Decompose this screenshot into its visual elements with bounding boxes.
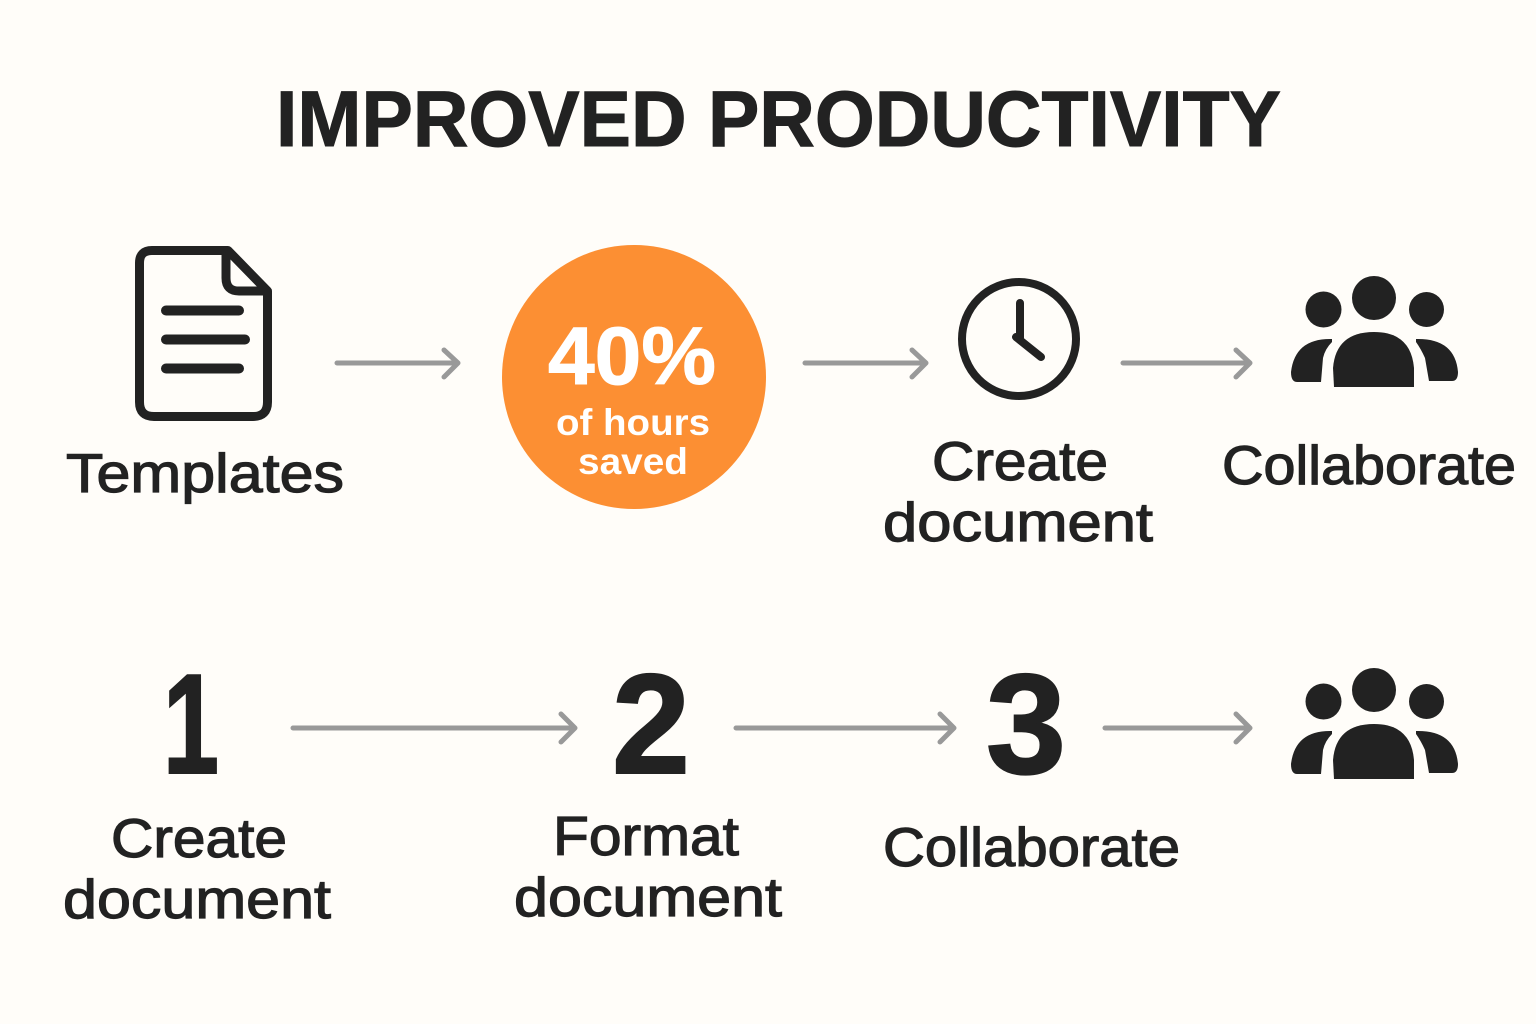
label: Format document, step 2: document bbox=[514, 866, 782, 928]
number 2: 2 bbox=[612, 645, 690, 804]
arrow: step 3 to people bbox=[1105, 714, 1250, 742]
icon: people group bbox=[1291, 276, 1458, 387]
icon: clock bbox=[962, 282, 1076, 396]
stat circle: 40% of hours saved bbox=[502, 245, 766, 509]
label: Create document: Create bbox=[932, 430, 1108, 492]
title: IMPROVED PRODUCTIVITY bbox=[276, 74, 1281, 163]
label: Create document bbox=[883, 430, 1153, 553]
label: Templates: Templates bbox=[66, 442, 344, 504]
arrow: step 1 to step 2 bbox=[293, 714, 575, 742]
label: Create document, step 1 bbox=[63, 807, 331, 930]
label: Create document, step 1: document bbox=[63, 868, 331, 930]
arrow: 40 percent to clock bbox=[805, 350, 926, 377]
icon: people group, step row bbox=[1291, 668, 1458, 779]
label: Format document, step 2 bbox=[514, 805, 782, 928]
number 3: 3 bbox=[986, 645, 1066, 804]
arrow: templates to 40 percent bbox=[337, 350, 458, 377]
label: Create document: document bbox=[883, 491, 1153, 553]
arrow: clock to people bbox=[1123, 350, 1250, 377]
stat circle: 40% of hours saved: 40% bbox=[548, 311, 716, 402]
label: Format document, step 2: Format bbox=[553, 805, 739, 867]
label: Collaborate: Collaborate bbox=[1222, 434, 1516, 496]
number 1: 1 bbox=[163, 645, 219, 804]
stat circle: 40% of hours saved: saved bbox=[578, 441, 688, 482]
icon: document template bbox=[140, 250, 268, 416]
label: Collaborate, step 3: Collaborate bbox=[883, 816, 1180, 878]
arrow: step 2 to step 3 bbox=[736, 714, 954, 742]
stat circle: 40% of hours saved: of hours bbox=[556, 402, 710, 443]
label: Create document, step 1: Create bbox=[111, 807, 287, 869]
